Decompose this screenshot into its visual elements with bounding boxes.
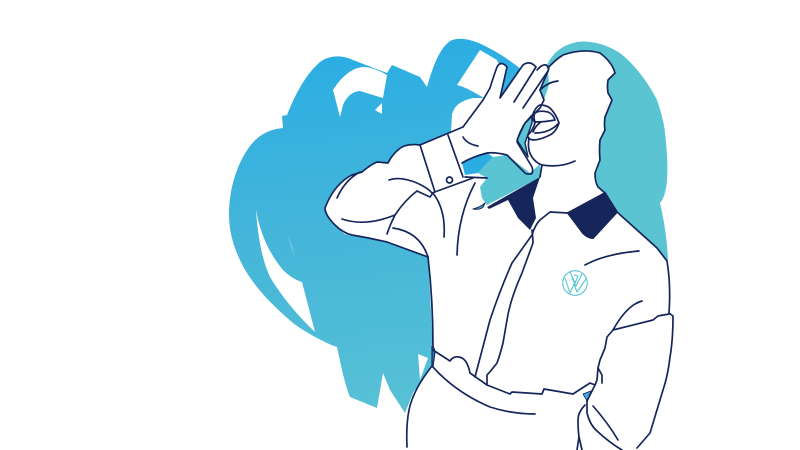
torso and shoulder outline — [428, 212, 673, 448]
raised hand outline — [462, 63, 549, 174]
teal strip between hand and chin — [517, 115, 532, 157]
blue brush-stroke background — [229, 39, 522, 413]
blue patch under hand — [462, 153, 493, 175]
navy right collar — [568, 193, 617, 238]
open mouth — [528, 105, 559, 140]
hair wisp — [473, 203, 485, 209]
navy left collar — [487, 177, 540, 230]
white figure silhouette — [325, 51, 673, 450]
shirt cuff and button — [420, 127, 473, 193]
icon: VW logo — [563, 271, 587, 295]
waistband — [407, 350, 595, 447]
navy mark at waist — [432, 347, 435, 366]
blue fragment at pocket — [583, 391, 591, 401]
sleeve outline — [325, 145, 487, 257]
head and face outline — [528, 51, 615, 193]
teal strip beside fingers — [540, 70, 549, 100]
right arm outline — [577, 301, 669, 450]
teal patch under hand — [478, 155, 541, 205]
teal hair — [535, 42, 668, 260]
